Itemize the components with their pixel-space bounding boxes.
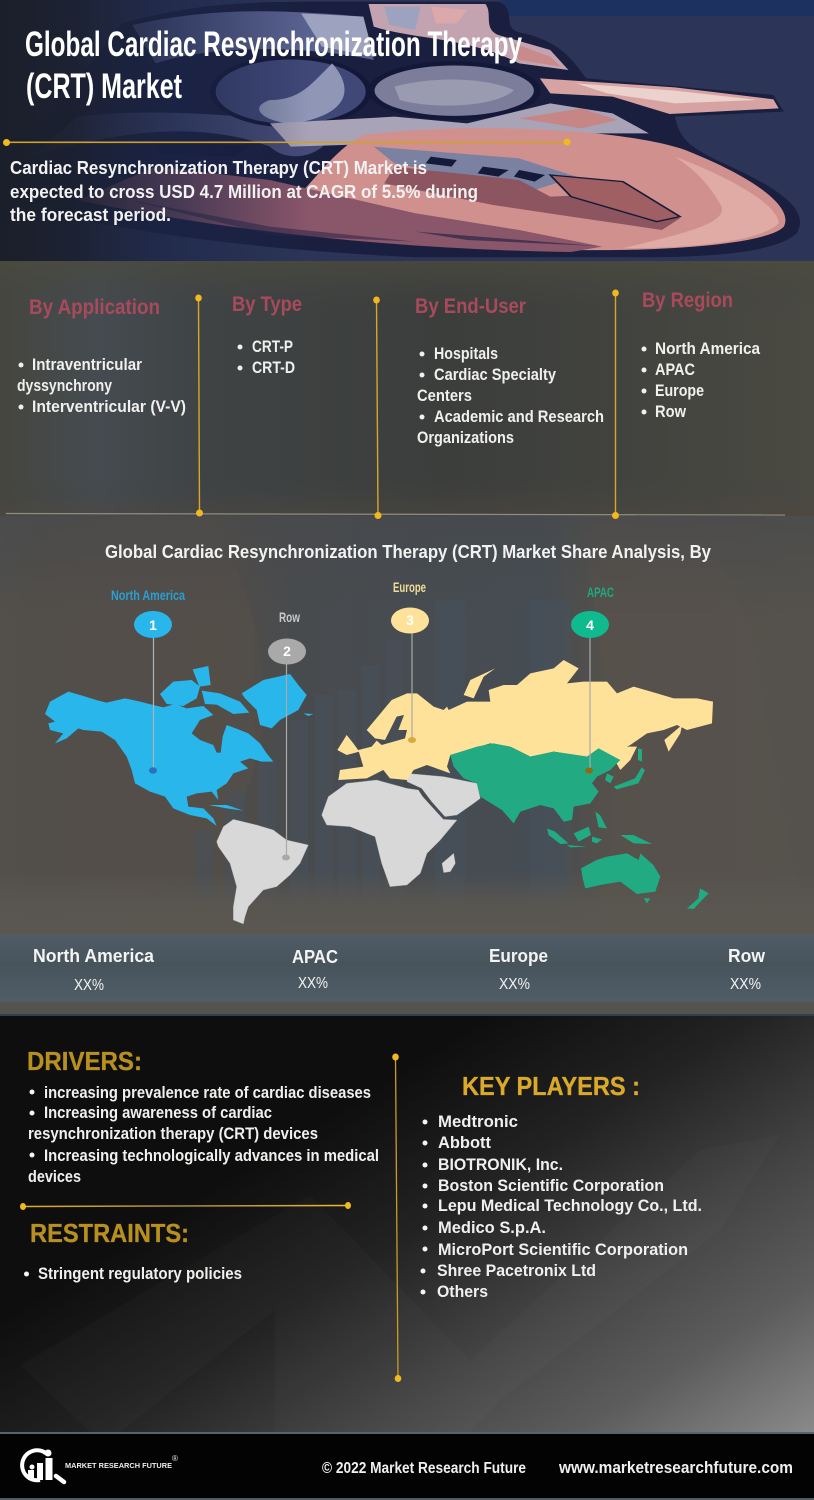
title: (CRT) Market [26, 67, 182, 106]
segment: by end-user: Hospitals [434, 345, 498, 363]
key players: BIOTRONIK, Inc. [438, 1156, 563, 1174]
logo: MARKET RESEARCH FUTURE [65, 1461, 172, 1470]
summary text: Cardiac Resynchronization Therapy (CRT) Market is [10, 158, 427, 178]
region: North America [45, 666, 313, 826]
panel: footer [0, 1432, 814, 1500]
panel: drivers, restraints and key players [0, 1016, 814, 1432]
divider: vertical [392, 1054, 401, 1382]
share: Row: XX% [730, 976, 761, 993]
pin: Europe: Europe [393, 579, 426, 595]
restraints [24, 1218, 242, 1283]
world map [45, 660, 713, 924]
segment: by region: By Region [642, 289, 733, 312]
share: Row: Row [728, 946, 766, 966]
summary text [10, 158, 478, 225]
title divider [3, 138, 570, 146]
pin: Row [268, 609, 306, 860]
title: Global Cardiac Resynchronization Therapy [25, 25, 522, 64]
share: APAC: XX% [298, 975, 328, 992]
share: APAC: APAC [292, 947, 338, 967]
segment: by end-user: Cardiac Specialty [434, 366, 557, 384]
summary text: expected to cross USD 4.7 Million at CAGR of 5.5% during [10, 182, 478, 202]
segment: by application: dyssynchrony [17, 377, 113, 395]
pin: Row: Row [279, 609, 300, 625]
segment: by type: CRT-P [252, 338, 293, 356]
region: Europe and Russia [337, 660, 713, 780]
share: North America: North America [33, 946, 155, 966]
segment: by end-user: Organizations [417, 429, 514, 447]
segment: by application: Interventricular (V-V) [32, 398, 186, 416]
key players: Boston Scientific Corporation [438, 1177, 664, 1195]
key players: Medtronic [438, 1113, 518, 1131]
copyright: © 2022 Market Research Future [322, 1460, 526, 1477]
pin: Europe: 3 [406, 612, 414, 628]
segment: by application: By Application [29, 296, 160, 319]
drivers: Increasing awareness of cardiac [44, 1104, 272, 1122]
logo: ® [172, 1454, 178, 1463]
panel: market segments [0, 261, 814, 516]
key players: Shree Pacetronix Ltd [437, 1262, 596, 1280]
pin: North America: 1 [149, 617, 157, 633]
segment: by region: North America [655, 340, 761, 358]
drivers: devices [28, 1168, 81, 1186]
drivers: increasing prevalence rate of cardiac diseases [44, 1084, 371, 1102]
segment: by end-user: Academic and Research [434, 408, 604, 426]
share: Europe: Europe [489, 946, 548, 966]
key players [420, 1071, 702, 1301]
pin: North America [111, 587, 185, 774]
segment: by application [17, 296, 186, 416]
key players: Abbott [438, 1134, 491, 1152]
segment: by region: APAC [655, 361, 695, 379]
key players: Others [437, 1283, 488, 1301]
background hands and bars [0, 516, 800, 900]
segment: by region: Row [655, 403, 686, 421]
pin: APAC [571, 584, 614, 774]
segment dividers [6, 290, 785, 519]
drivers: DRIVERS: [27, 1046, 142, 1076]
region: APAC [450, 743, 709, 909]
drivers: resynchronization therapy (CRT) devices [28, 1125, 318, 1143]
pin: APAC: 4 [586, 617, 594, 633]
restraints: Stringent regulatory policies [38, 1265, 242, 1283]
website: www.marketresearchfuture.com [558, 1459, 793, 1477]
share: North America [33, 946, 155, 994]
segment: by type: CRT-D [252, 359, 295, 377]
share: Europe [489, 946, 548, 993]
share: North America: XX% [74, 977, 104, 994]
segment: by end-user: By End-User [415, 295, 526, 318]
chart heading: Global Cardiac Resynchronization Therapy (CRT) Market Share Analysis, By [105, 542, 711, 562]
drivers [27, 1046, 379, 1186]
segment: by application: Intraventricular [32, 356, 143, 374]
region: Row [217, 773, 480, 924]
key players: KEY PLAYERS : [462, 1071, 640, 1101]
pin: Row: 2 [283, 643, 291, 659]
key players: Lepu Medical Technology Co., Ltd. [438, 1197, 702, 1215]
share: Europe: XX% [499, 976, 530, 993]
segment: by region [642, 289, 761, 421]
restraints: RESTRAINTS: [30, 1218, 189, 1248]
panel: market share map [0, 516, 814, 934]
pin: North America: North America [111, 587, 185, 603]
share: Row [728, 946, 766, 993]
panel: header [0, 0, 814, 261]
key players: Medico S.p.A. [438, 1219, 546, 1237]
panel: regional share table [0, 934, 814, 1016]
pin: Europe [391, 579, 429, 743]
segment: by type: By Type [232, 293, 302, 316]
title [25, 25, 522, 106]
segment: by type [232, 293, 302, 377]
heart illustration [0, 2, 800, 257]
segment: by end-user [415, 295, 604, 447]
summary text: the forecast period. [10, 205, 171, 225]
divider: drivers and restraints [20, 1202, 351, 1210]
segment: by end-user: Centers [417, 387, 472, 405]
segment: by region: Europe [655, 382, 704, 400]
pin: APAC: APAC [587, 584, 614, 600]
key players: MicroPort Scientific Corporation [438, 1241, 688, 1259]
logo [22, 1450, 178, 1482]
drivers: Increasing technologically advances in medical [44, 1147, 379, 1165]
share: APAC [292, 947, 338, 992]
